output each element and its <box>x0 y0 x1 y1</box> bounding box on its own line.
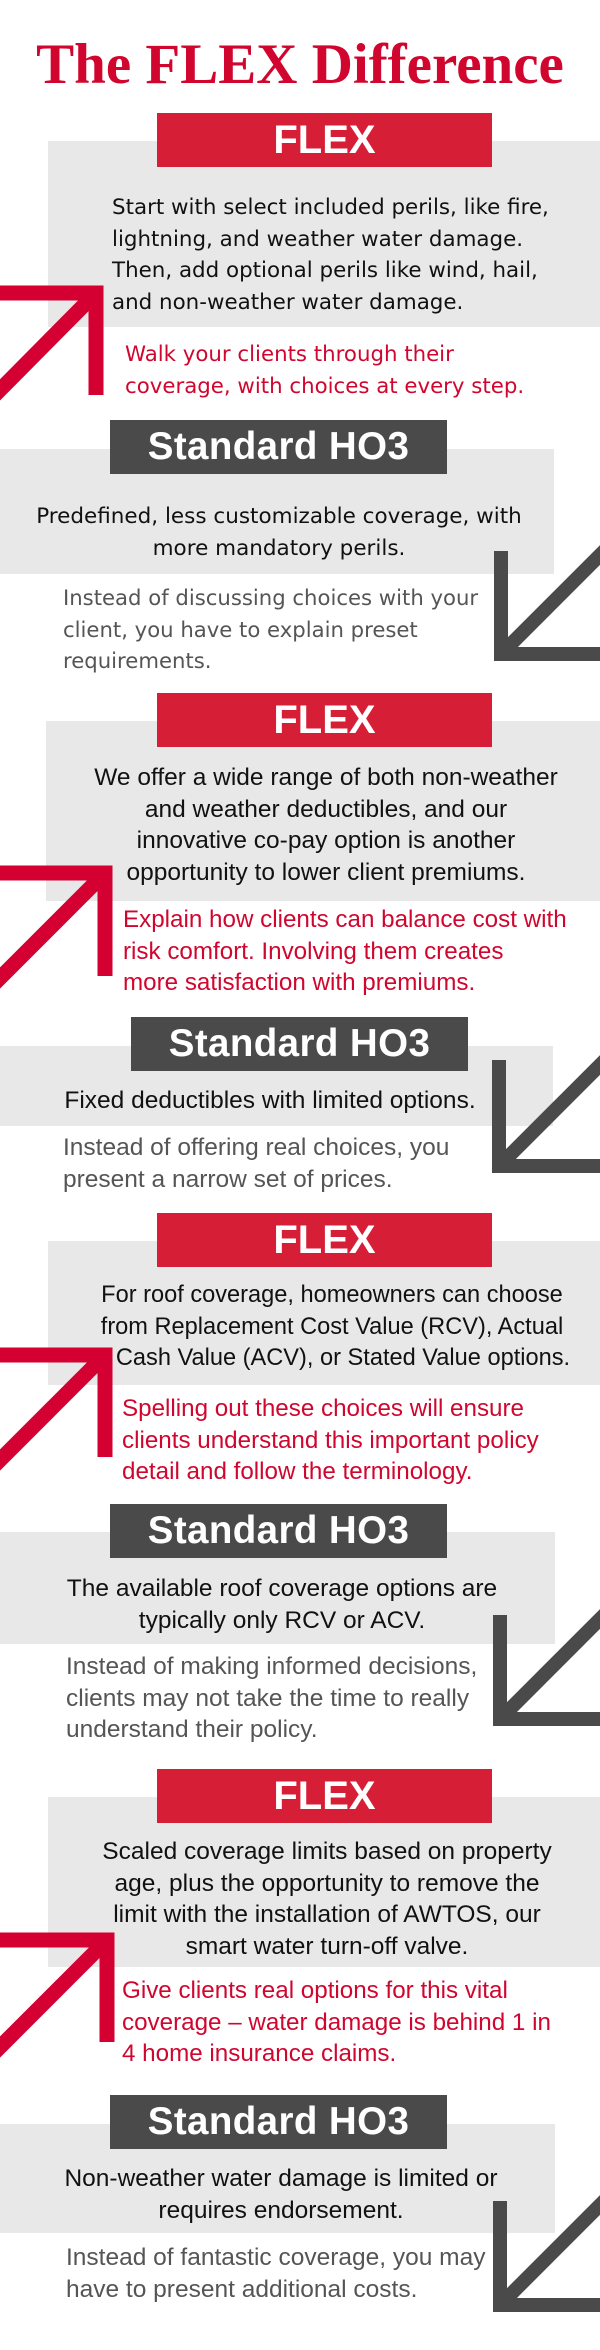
text: standard 2 note: present a narrow set of prices. <box>63 1166 393 1192</box>
text: flex 4 tip <box>122 1977 551 2067</box>
text: standard 1 note: client, you have to explain preset <box>63 616 418 642</box>
text: flex 3 tip: detail and follow the terminology. <box>122 1458 472 1485</box>
text: flex 2 tip: more satisfaction with premiums. <box>123 969 475 996</box>
text: standard 4 body: requires endorsement. <box>158 2196 404 2224</box>
text: flex 1 tip <box>125 342 524 398</box>
text: flex 1 body: Start with select included perils, like fire, <box>112 195 549 220</box>
label: Standard HO3: Standard HO3 <box>148 1509 409 1552</box>
panel: flex 1 <box>48 113 600 398</box>
label: Standard HO3 <box>110 1504 447 1558</box>
panel: standard 3 <box>0 1504 555 1743</box>
text: flex 4 body <box>102 1838 552 1960</box>
label: Standard HO3 <box>131 1017 468 1071</box>
text: standard 3 body <box>67 1575 497 1634</box>
text: flex 3 body: For roof coverage, homeowners can choose <box>101 1282 563 1308</box>
text: standard 1 body: more mandatory perils. <box>153 536 405 560</box>
text: standard 4 note: Instead of fantastic coverage, you may <box>66 2244 485 2271</box>
label: Standard HO3 <box>110 420 447 474</box>
panel: standard 1 <box>0 420 554 673</box>
text: flex 1 tip: coverage, with choices at every step. <box>125 374 524 398</box>
text: standard 3 body: The available roof coverage options are <box>67 1575 497 1602</box>
text: flex 4 body: smart water turn-off valve. <box>186 1932 468 1960</box>
text: flex 4 body: age, plus the opportunity to remove the <box>115 1870 539 1896</box>
panel: standard 4 <box>0 2095 555 2302</box>
label: FLEX <box>157 693 492 747</box>
title: The FLEX Difference <box>36 33 564 96</box>
label: Standard HO3 <box>110 2095 447 2149</box>
text: standard 3 note <box>66 1653 477 1743</box>
label: Standard HO3: Standard HO3 <box>169 1022 430 1065</box>
text: standard 1 body: Predefined, less customizable coverage, with <box>36 504 522 529</box>
text: flex 2 tip <box>123 906 567 996</box>
text: standard 3 note: Instead of making informed decisions, <box>66 1653 477 1680</box>
text: flex 3 tip: Spelling out these choices will ensure <box>122 1395 524 1422</box>
text: flex 2 tip: risk comfort. Involving them creates <box>123 938 503 964</box>
text: flex 2 body: innovative co-pay option is another <box>137 827 515 854</box>
text: standard 1 note: Instead of discussing choices with your <box>63 585 478 610</box>
text: flex 2 body <box>94 764 558 886</box>
text: flex 3 body: from Replacement Cost Value (RCV), Actual <box>101 1314 563 1340</box>
text: flex 4 tip: coverage – water damage is behind 1 in <box>122 2008 551 2036</box>
text: flex 1 body <box>112 195 549 314</box>
label: FLEX: FLEX <box>273 1774 376 1818</box>
text: standard 3 body: typically only RCV or ACV. <box>139 1606 425 1634</box>
text: standard 2 body: Fixed deductibles with limited options. <box>64 1087 476 1114</box>
panel: standard 2 <box>0 1017 553 1192</box>
panel: flex 3 <box>48 1213 600 1485</box>
text: flex 2 body: and weather deductibles, and our <box>145 796 507 822</box>
text: standard 4 note: have to present additional costs. <box>66 2276 417 2302</box>
label: FLEX: FLEX <box>273 698 376 742</box>
text: flex 3 body <box>101 1282 570 1371</box>
text: flex 4 body: limit with the installation of AWTOS, our <box>113 1901 541 1928</box>
label: FLEX <box>157 1769 492 1823</box>
text: flex 3 tip: clients understand this important policy <box>122 1426 539 1454</box>
text: flex 1 tip: Walk your clients through their <box>125 342 454 367</box>
text: flex 4 tip: 4 home insurance claims. <box>122 2040 396 2067</box>
panel: flex 2 <box>46 693 600 996</box>
text: standard 2 note <box>63 1134 449 1192</box>
label: Standard HO3: Standard HO3 <box>148 2100 409 2143</box>
text: flex 2 tip: Explain how clients can balance cost with <box>123 906 567 933</box>
text: standard 4 body: Non-weather water damage is limited or <box>64 2165 498 2192</box>
text: standard 3 note: understand their policy. <box>66 1716 318 1743</box>
text: flex 3 tip <box>122 1395 539 1485</box>
label: FLEX <box>157 113 492 167</box>
text: standard 1 note: requirements. <box>63 648 212 673</box>
text: standard 3 note: clients may not take the time to really <box>66 1684 469 1712</box>
label: FLEX: FLEX <box>273 1218 376 1262</box>
text: flex 4 tip: Give clients real options for this vital <box>122 1977 508 2004</box>
panel: flex 4 <box>48 1769 600 2067</box>
text: standard 2 note: Instead of offering real choices, you <box>63 1134 449 1161</box>
text: flex 4 body: Scaled coverage limits based on property <box>102 1838 552 1865</box>
text: flex 3 body: Cash Value (ACV), or Stated Value options. <box>116 1345 570 1371</box>
label: Standard HO3: Standard HO3 <box>148 425 409 468</box>
text: standard 4 body <box>64 2165 498 2224</box>
text: flex 1 body: Then, add optional perils like wind, hail, <box>112 258 538 283</box>
text: flex 1 body: lightning, and weather water damage. <box>112 226 523 252</box>
text: flex 1 body: and non-weather water damage. <box>112 290 463 314</box>
text: flex 2 body: We offer a wide range of both non-weather <box>94 764 558 791</box>
text: standard 1 note <box>63 585 478 673</box>
label: FLEX: FLEX <box>273 118 376 162</box>
text: standard 4 note <box>66 2244 486 2302</box>
label: FLEX <box>157 1213 492 1267</box>
text: flex 2 body: opportunity to lower client premiums. <box>126 858 525 886</box>
text: standard 1 body <box>36 504 522 560</box>
